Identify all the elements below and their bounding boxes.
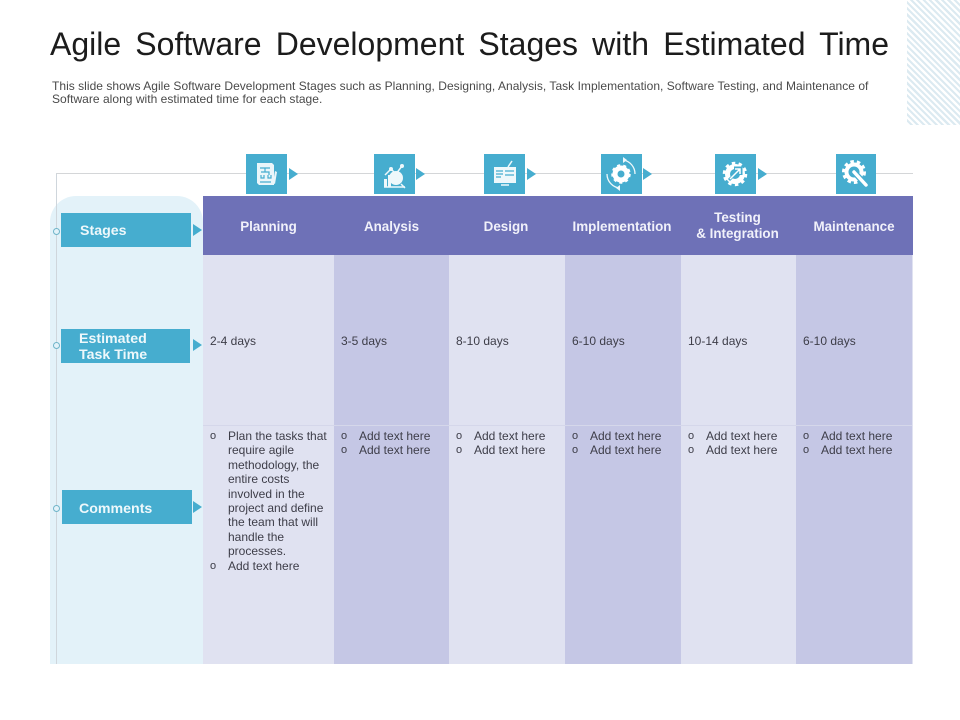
- comments: Implementation: o: [572, 430, 578, 442]
- header: Testing & Integration: Testing: [714, 210, 761, 224]
- header: Maintenance: Maintenance: [813, 218, 895, 234]
- label: Comments: [62, 490, 192, 524]
- comments: Design: o: [456, 430, 462, 442]
- time: Maintenance: 6-10 days: [803, 334, 856, 348]
- arrow: [758, 168, 767, 180]
- subtitle text block: This slide shows Agile Software Development Stages such as Planning, Designing, Analysis, Task Implementation, Software Testing, and Maintenance of: [52, 79, 868, 93]
- comments: Planning: entire costs: [228, 472, 289, 486]
- table header band: [203, 196, 913, 255]
- arrow: [416, 168, 425, 180]
- time: Planning: 2-4 days: [210, 334, 256, 348]
- icon: design: [484, 154, 525, 194]
- comments: Design: o: [456, 444, 462, 456]
- label: Stages: [61, 213, 191, 247]
- comments: Planning: o: [210, 430, 216, 442]
- label: Stages: Stages: [80, 223, 127, 239]
- icon: planning: [246, 154, 287, 194]
- arrow: [289, 168, 298, 180]
- arrow: [527, 168, 536, 180]
- subtitle text block: [52, 79, 868, 106]
- comments: Planning: require agile: [228, 443, 294, 457]
- arrow: [193, 501, 202, 513]
- label: Estimated Task Time: [61, 329, 190, 363]
- comments: Planning: Plan the tasks that: [228, 429, 327, 443]
- comments: Maintenance: o: [803, 444, 809, 456]
- arrow: [643, 168, 652, 180]
- comments: Testing: o: [688, 444, 694, 456]
- time: Testing: 10-14 days: [688, 334, 747, 348]
- header: Planning: Planning: [240, 218, 297, 234]
- marker: [53, 228, 60, 235]
- icon: implementation: [601, 154, 642, 194]
- marker: [53, 342, 60, 349]
- comments: Planning: [210, 429, 327, 573]
- comments: Analysis: o: [341, 430, 347, 442]
- comments: Planning: project and define: [228, 501, 323, 515]
- subtitle text block: Software along with estimated time for each stage.: [52, 92, 322, 106]
- column backgrounds: [203, 255, 913, 664]
- timeline connector frame: [56, 173, 913, 664]
- comments: Maintenance: o: [803, 430, 809, 442]
- header: Testing & Integration: & Integration: [696, 226, 779, 240]
- label: Estimated Task Time: Estimated: [79, 331, 147, 347]
- comments: Testing: Add text here: [706, 443, 777, 457]
- comments: Planning: methodology, the: [228, 458, 319, 472]
- header: Design: Design: [484, 218, 528, 234]
- arrow: [193, 224, 202, 236]
- comments: Analysis: o: [341, 444, 347, 456]
- title: Agile Software Development Stages with Estimated Time: [50, 26, 889, 62]
- arrow: [193, 339, 202, 351]
- decorative hatched corner: [907, 0, 960, 125]
- comments: Analysis: Add text here: [359, 443, 430, 457]
- comments: Design: Add text here: [474, 429, 545, 443]
- comments: Design: [456, 429, 545, 457]
- icon: testing: [715, 154, 756, 194]
- icon: maintenance: [836, 154, 876, 194]
- comments: Analysis: [341, 429, 430, 457]
- marker: [53, 505, 60, 512]
- header: Implementation: Implementation: [573, 218, 671, 234]
- header: Testing & Integration: [696, 210, 779, 241]
- comments: Planning: Add text here: [228, 559, 299, 573]
- comments: Testing: Add text here: [706, 429, 777, 443]
- comments: Testing: o: [688, 430, 694, 442]
- comments: Implementation: Add text here: [590, 443, 661, 457]
- comments: Planning: the team that will: [228, 515, 318, 529]
- comments: Design: Add text here: [474, 443, 545, 457]
- time: Design: 8-10 days: [456, 334, 509, 348]
- comments: Implementation: o: [572, 444, 578, 456]
- comments: Maintenance: Add text here: [821, 429, 892, 443]
- comments: Planning: o: [210, 560, 216, 572]
- comments: Planning: involved in the: [228, 487, 305, 501]
- comments: Maintenance: [803, 429, 892, 457]
- table columns: [203, 255, 913, 664]
- time: Analysis: 3-5 days: [341, 334, 387, 348]
- header: Analysis: Analysis: [364, 218, 419, 234]
- left pale panel: [50, 196, 203, 664]
- label: Estimated Task Time: Task Time: [79, 347, 147, 363]
- comments: Analysis: Add text here: [359, 429, 430, 443]
- icon: analysis: [374, 154, 415, 194]
- comments: Maintenance: Add text here: [821, 443, 892, 457]
- comments: Testing: [688, 429, 777, 457]
- comments: Planning: handle the: [228, 530, 284, 544]
- comments: Implementation: [572, 429, 661, 457]
- comments: Implementation: Add text here: [590, 429, 661, 443]
- comments: Planning: processes.: [228, 544, 286, 558]
- time: Implementation: 6-10 days: [572, 334, 625, 348]
- label: Comments: Comments: [79, 501, 152, 517]
